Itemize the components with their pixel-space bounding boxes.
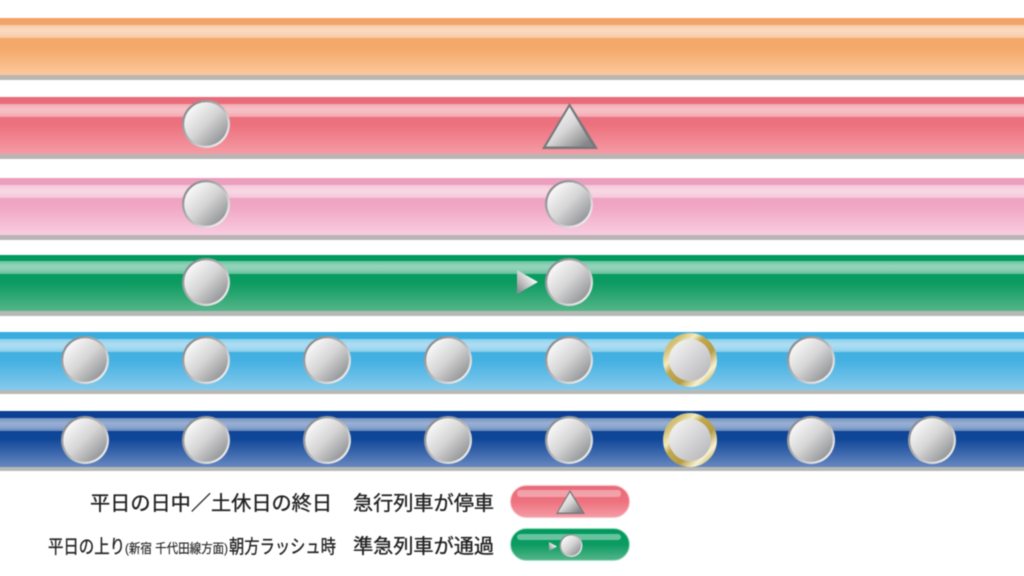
station marker	[303, 416, 351, 464]
station marker	[545, 258, 593, 306]
band: pink line	[0, 178, 1024, 240]
legend triangle icon	[556, 490, 585, 514]
station marker	[61, 336, 109, 384]
band: red line	[0, 97, 1024, 159]
legend pill: green with pass marker	[510, 528, 630, 560]
station marker	[182, 100, 230, 148]
legend text: semi-express passes: 準急列車が通過	[353, 535, 494, 558]
legend text: daytime schedule: 平日の日中／土休日の終日	[90, 492, 332, 515]
station marker	[424, 336, 472, 384]
legend text: direction note: (新宿 千代田線方面)	[125, 541, 228, 556]
band: orange line	[0, 18, 1024, 80]
legend text: morning rush: 朝方ラッシュ時	[229, 536, 336, 558]
station marker	[424, 416, 472, 464]
gold station marker	[663, 333, 717, 387]
pass-through arrow	[517, 270, 538, 294]
station marker	[182, 416, 230, 464]
station marker	[545, 336, 593, 384]
station marker	[545, 416, 593, 464]
legend arrow icon	[549, 542, 557, 551]
station marker	[182, 258, 230, 306]
station marker	[787, 336, 835, 384]
station marker	[61, 416, 109, 464]
station marker	[908, 416, 956, 464]
legend text: morning rush schedule: 平日の上り	[48, 536, 125, 558]
gold station marker	[663, 413, 717, 467]
station triangle marker	[542, 103, 598, 149]
legend text: express stops: 急行列車が停車	[353, 492, 494, 515]
band: green line	[0, 255, 1024, 316]
station marker	[182, 336, 230, 384]
station marker	[303, 336, 351, 384]
band: navy line	[0, 411, 1024, 471]
station marker	[787, 416, 835, 464]
station marker	[182, 180, 230, 228]
legend station icon	[560, 534, 582, 557]
legend pill: red with triangle	[510, 486, 630, 518]
band: sky blue line	[0, 332, 1024, 394]
station marker	[545, 180, 593, 228]
